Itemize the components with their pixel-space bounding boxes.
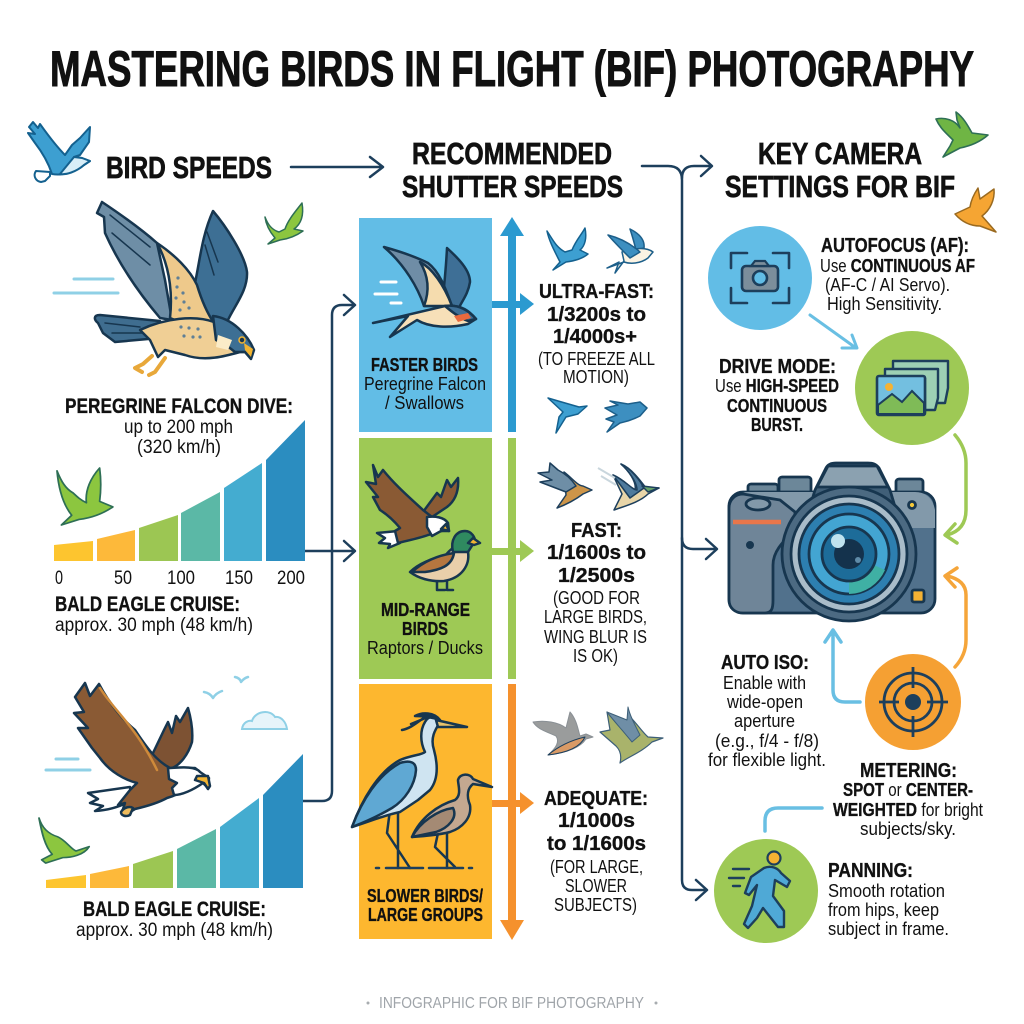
body	[140, 318, 252, 358]
label: LARGE GROUPS	[368, 905, 483, 925]
text: peregrine falcon dive: up to 200 mph	[124, 417, 233, 438]
icon: heron	[352, 713, 467, 868]
circle: metering icon	[865, 654, 961, 750]
circle: panning icon	[714, 839, 818, 943]
text: bald eagle cruise bottom: BALD EAGLE CRUISE:	[83, 898, 266, 921]
text: drive mode: DRIVE MODE:	[719, 356, 836, 378]
arrow: metering to camera (orange)	[945, 568, 966, 667]
side controls	[908, 502, 916, 508]
text: fast: WING BLUR IS	[544, 627, 647, 647]
body	[729, 492, 935, 613]
label: SLOWER BIRDS/	[367, 886, 483, 906]
text: fast: 1/1600s to	[547, 542, 646, 564]
icon: ultra-fast bird 2	[607, 229, 653, 273]
chart axis labels: 200	[277, 568, 305, 589]
text: auto iso: for flexible light.	[708, 750, 826, 770]
arrow: orange speed scale	[492, 684, 534, 940]
label: Peregrine Falcon	[364, 374, 486, 394]
panel: faster birds	[359, 218, 492, 432]
icon: green bird left	[57, 468, 113, 525]
text: adequate: (FOR LARGE,	[550, 857, 643, 877]
text: fast	[544, 520, 647, 666]
panel: mid-range birds	[359, 438, 492, 679]
icon: ultra-fast bird 4	[605, 401, 647, 432]
text: panning	[828, 860, 949, 939]
text: drive mode: BURST.	[751, 415, 803, 435]
heading: bird speeds: BIRD SPEEDS	[106, 150, 272, 185]
text: autofocus: AUTOFOCUS (AF):	[821, 235, 969, 257]
text: ultra-fast	[538, 281, 655, 387]
text: bald eagle cruise top: BALD EAGLE CRUISE:	[55, 593, 240, 616]
text: drive mode: Use HIGH-SPEED	[715, 376, 839, 396]
text: bald eagle cruise top	[55, 593, 253, 636]
text: ultra-fast: MOTION)	[563, 367, 629, 387]
text: auto iso: AUTO ISO:	[721, 652, 809, 674]
icon: small sky birds and cloud	[204, 677, 287, 729]
text: autofocus: High Sensitivity.	[827, 294, 942, 314]
tail	[95, 315, 160, 342]
arrow: bird speeds to shutter speeds	[291, 157, 383, 177]
white head	[168, 767, 209, 795]
far wing	[150, 708, 192, 770]
icon: bald eagle	[46, 683, 210, 816]
text: metering: METERING:	[860, 760, 957, 782]
text: panning: PANNING:	[828, 860, 913, 882]
heading: recommended shutter speeds: SHUTTER SPEEDS	[402, 169, 623, 204]
text: fast: LARGE BIRDS,	[544, 607, 647, 627]
icon: ultra-fast bird 3	[548, 398, 587, 433]
speed lines	[54, 279, 118, 293]
text: auto iso: Enable with	[723, 673, 806, 693]
prism hump	[800, 463, 905, 540]
text: fast: IS OK)	[573, 646, 618, 666]
heading: recommended shutter speeds	[402, 136, 623, 204]
label: / Swallows	[385, 393, 464, 413]
text: autofocus: Use CONTINUOUS AF	[820, 256, 975, 276]
chart axis labels: 150	[225, 568, 253, 589]
icon: adequate bird 2	[600, 707, 663, 763]
chart axis labels: 0	[55, 568, 63, 589]
icon: adequate bird 1	[533, 712, 593, 755]
text: auto iso: wide-open	[726, 692, 803, 712]
arrow: metering to panning	[765, 808, 822, 831]
chest spots	[174, 276, 202, 339]
text: ultra-fast: ULTRA-FAST:	[539, 281, 654, 303]
foot	[121, 807, 133, 816]
text: adequate: 1/1000s	[558, 810, 635, 832]
arrow: shutter speeds to camera settings tree	[642, 156, 717, 900]
text: panning: from hips, keep	[828, 900, 939, 920]
icon: duck	[410, 531, 480, 590]
icon: flying eagle	[366, 465, 458, 548]
icon: green bird top right	[936, 112, 988, 157]
label: BIRDS	[402, 619, 448, 639]
chart: bottom speed bars	[46, 754, 303, 888]
text: bald eagle cruise bottom	[76, 898, 273, 941]
text: peregrine falcon dive: PEREGRINE FALCON DIVE:	[65, 395, 293, 418]
text: autofocus: (AF-C / AI Servo).	[825, 275, 950, 295]
icon: fast bird 2	[598, 464, 659, 510]
label	[364, 355, 486, 413]
text: drive mode	[715, 356, 839, 435]
heading: recommended shutter speeds: RECOMMENDED	[412, 136, 612, 171]
top dials	[748, 484, 778, 498]
text: adequate	[544, 788, 648, 915]
chart axis labels: 100	[167, 568, 195, 589]
arrow: metering to camera (blue)	[825, 630, 860, 702]
text: adequate: SLOWER	[565, 876, 627, 896]
label: MID-RANGE	[381, 600, 470, 620]
text: metering: subjects/sky.	[860, 819, 956, 839]
label	[367, 886, 483, 925]
arrow: blue speed scale	[492, 217, 534, 432]
text: drive mode: CONTINUOUS	[727, 396, 827, 416]
text: metering	[833, 760, 983, 839]
icon: camera	[729, 463, 935, 621]
icon: fast bird 1	[538, 463, 592, 508]
icon: blue eagle top left	[28, 122, 90, 182]
body and near wing	[74, 683, 200, 812]
text: metering: SPOT or CENTER-	[843, 780, 973, 800]
chart: top speed bars	[54, 420, 305, 561]
text: ultra-fast: (TO FREEZE ALL	[538, 349, 655, 369]
text: autofocus	[820, 235, 975, 314]
ground	[376, 867, 472, 869]
label: Raptors / Ducks	[367, 638, 483, 658]
arrow: green speed scale	[492, 438, 534, 679]
icon: smaller heron	[412, 775, 492, 868]
text: peregrine falcon dive	[65, 395, 293, 458]
arrow: autofocus to drive mode	[810, 315, 857, 348]
chart axis labels	[55, 568, 305, 589]
icon: peregrine falcon	[54, 202, 254, 375]
text: fast: (GOOD FOR	[553, 588, 640, 608]
text: ultra-fast: 1/3200s to	[547, 304, 646, 326]
text: panning: Smooth rotation	[828, 881, 945, 901]
grip	[729, 494, 795, 613]
text: fast: 1/2500s	[558, 565, 635, 587]
panel: slower birds	[352, 684, 492, 939]
heading: key camera settings	[725, 136, 955, 204]
text: bald eagle cruise top: approx. 30 mph (48 km/h)	[55, 615, 253, 636]
text: metering: WEIGHTED for bright	[833, 800, 983, 820]
text: auto iso: aperture	[734, 711, 795, 731]
icon: green bird bottom left	[39, 818, 89, 863]
text: fast: FAST:	[571, 520, 622, 542]
text: adequate: ADEQUATE:	[544, 788, 648, 810]
near wing	[97, 202, 172, 320]
label	[367, 600, 483, 658]
icon: orange bird top right	[955, 188, 996, 232]
feet	[135, 356, 165, 375]
chart axis labels: 50	[114, 568, 132, 589]
heading: key camera settings: KEY CAMERA	[758, 136, 922, 171]
tail	[88, 787, 132, 811]
icon: ultra-fast bird 1	[547, 228, 588, 270]
head	[213, 316, 254, 359]
far wing	[195, 211, 247, 320]
footer caption: INFOGRAPHIC FOR BIF PHOTOGRAPHY	[379, 995, 644, 1012]
text: peregrine falcon dive: (320 km/h)	[137, 437, 221, 458]
arrow: drive mode to camera	[945, 435, 966, 543]
text: bald eagle cruise bottom: approx. 30 mph (48 km/h)	[76, 920, 273, 941]
icon: small green bird top	[265, 203, 303, 244]
label: FASTER BIRDS	[371, 355, 478, 375]
circle: drive mode icon	[855, 331, 969, 445]
icon: swallow	[373, 247, 476, 337]
arrow: chart connector tree	[303, 295, 355, 801]
text: auto iso: (e.g., f/4 - f/8)	[715, 731, 819, 751]
text: auto iso	[708, 652, 826, 770]
circle: autofocus icon	[708, 226, 812, 330]
text: ultra-fast: 1/4000s+	[553, 326, 637, 348]
lens	[782, 487, 916, 621]
text: panning: subject in frame.	[828, 919, 949, 939]
text: adequate: SUBJECTS)	[554, 895, 637, 915]
text: adequate: to 1/1600s	[547, 833, 646, 855]
heading: key camera settings: SETTINGS FOR BIF	[725, 169, 955, 204]
